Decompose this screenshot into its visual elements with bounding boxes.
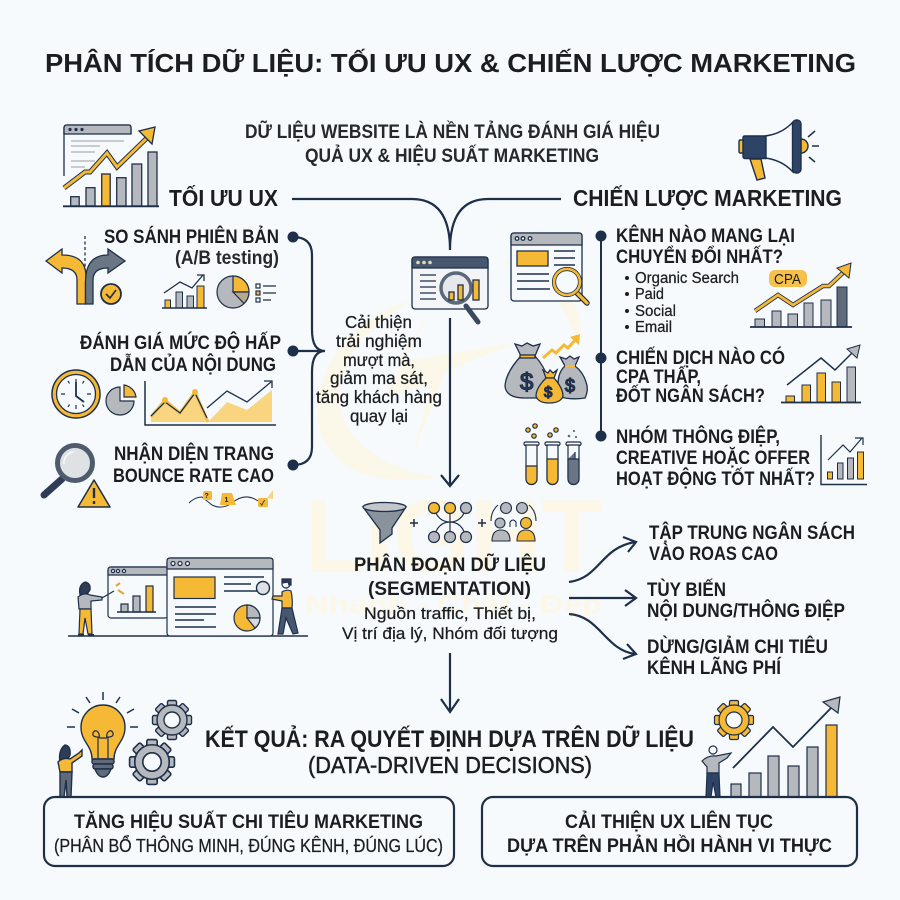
list: channels: Paid — [635, 286, 664, 303]
arrows: segmentation actions — [569, 537, 636, 659]
connector: headings to analysis icon — [292, 199, 561, 250]
icon: fork arrows — [46, 236, 125, 304]
icon: mini bar chart — [162, 275, 207, 308]
panel: marketing efficiency result: TĂNG HIỆU SUẤT CHI TIÊU MARKETING — [74, 809, 423, 833]
heading: segmentation — [354, 552, 546, 600]
text: CPA question: ĐỐT NGÂN SÁCH? — [616, 385, 765, 407]
text: A/B testing — [104, 226, 279, 269]
text: UX benefit: trải nghiệm — [336, 331, 422, 351]
chart: engagement area — [145, 381, 276, 425]
icon: bounce path: 1 — [224, 497, 228, 504]
panel: marketing items — [505, 225, 867, 490]
heading: segmentation: (SEGMENTATION) — [368, 578, 531, 600]
heading: Tối ưu UX: TỐI ƯU UX — [169, 184, 279, 211]
chart: CPA — [750, 263, 852, 327]
text: dimensions: Nguồn traffic, Thiết bị, — [364, 604, 536, 623]
icon: money bags: $ — [520, 369, 533, 396]
chart: campaign bars — [781, 345, 861, 402]
panel: UX improvement result: CẢI THIỆN UX LIÊN TỤC — [565, 809, 773, 833]
text: CPA question: CHIẾN DỊCH NÀO CÓ — [616, 347, 785, 369]
text: UX benefit: Cải thiện — [345, 312, 412, 332]
text: CPA question: CPA THẤP, — [616, 366, 701, 388]
chart: creative bars — [821, 435, 867, 484]
text: bounce rate: NHẬN DIỆN TRANG — [114, 443, 274, 465]
icon: growth chart with person — [702, 697, 840, 797]
text: action items: VÀO ROAS CAO — [649, 543, 778, 565]
text: bounce rate — [113, 443, 274, 487]
text: channels question — [616, 225, 795, 268]
heading: Chiến lược Marketing: CHIẾN LƯỢC MARKETING — [573, 184, 842, 211]
icon: small pie — [106, 385, 136, 415]
text: action items: TÙY BIẾN — [647, 579, 726, 601]
text: UX benefit — [316, 312, 442, 426]
icon: audience — [491, 502, 536, 541]
heading: segmentation: PHÂN ĐOẠN DỮ LIỆU — [354, 552, 546, 576]
panel: UX improvement result: DỰA TRÊN PHẢN HỒI HÀNH VI THỰC — [507, 833, 832, 857]
icon: clock — [52, 370, 100, 418]
subtitle — [245, 119, 660, 167]
icon: search window — [511, 233, 587, 303]
text: channels question: KÊNH NÀO MANG LẠI — [616, 225, 795, 247]
text: CPA question — [616, 347, 785, 407]
text: UX benefit: tăng khách hàng — [316, 387, 442, 407]
text: content engagement: DẪN CỦA NỘI DUNG — [110, 354, 276, 376]
icon: light bulb with gears — [58, 692, 192, 797]
illustration: people with dashboards — [68, 558, 308, 636]
text: dimensions — [342, 604, 558, 643]
icon: data analysis window — [412, 257, 488, 322]
icon: money bags: $ — [565, 376, 575, 396]
icon: network — [428, 502, 472, 542]
list: channels: Organic Search — [635, 270, 739, 287]
icon: UX growth chart — [63, 125, 159, 206]
text: dimensions: Vị trí địa lý, Nhóm đối tượng — [342, 624, 558, 643]
text: message question: HOẠT ĐỘNG TỐT NHẤT? — [616, 468, 815, 490]
watermark: Nhanh - Chất - Đẹp — [305, 591, 602, 619]
list: channels: Social — [635, 303, 676, 320]
list: channels: Email — [635, 319, 672, 336]
text: message question — [616, 426, 815, 490]
title: PHÂN TÍCH DỮ LIỆU: TỐI ƯU UX & CHIẾN LƯỢC MARKETING — [45, 48, 856, 78]
text: UX benefit: mượt mà, — [343, 350, 415, 370]
chart: CPA: CPA — [774, 272, 801, 288]
text: action items: KÊNH LÃNG PHÍ — [647, 657, 782, 679]
plus sign — [410, 519, 418, 527]
arrow: segmentation to result — [441, 653, 459, 712]
heading: result: KẾT QUẢ: RA QUYẾT ĐỊNH DỰA TRÊN DỮ LIỆU — [205, 724, 694, 753]
icon: test tubes — [524, 424, 581, 484]
icon: pie and legend — [217, 276, 276, 308]
icon: bounce path: ✓ — [260, 500, 266, 508]
list: channels — [625, 270, 739, 336]
text: action items — [647, 522, 855, 679]
heading: result — [205, 724, 694, 778]
text: bounce rate: BOUNCE RATE CAO — [113, 466, 274, 487]
timeline — [596, 230, 606, 442]
panel: marketing efficiency result — [44, 797, 454, 866]
text: action items: TẬP TRUNG NGÂN SÁCH — [649, 522, 855, 544]
icon: bounce path — [189, 490, 273, 508]
icon: money bags: $ — [544, 384, 553, 401]
panel: marketing efficiency result: (PHÂN BỔ THÔNG MINH, ĐÚNG KÊNH, ĐÚNG LÚC) — [54, 835, 443, 856]
text: action items: DỪNG/GIẢM CHI TIÊU — [647, 636, 828, 658]
panel: UX items — [44, 226, 281, 508]
text: A/B testing: (A/B testing) — [175, 248, 279, 269]
text: content engagement: ĐÁNH GIÁ MỨC ĐỘ HẤP — [80, 332, 281, 354]
panel: UX improvement result — [482, 797, 857, 866]
panel: segmentation — [342, 502, 558, 643]
arrow: analysis to segmentation — [441, 318, 459, 486]
connector: UX bracket — [288, 232, 325, 470]
text: A/B testing: SO SÁNH PHIÊN BẢN — [104, 226, 279, 248]
text: channels question: CHUYỂN ĐỔI NHẤT? — [616, 246, 783, 268]
icon: funnel — [363, 502, 406, 543]
text: UX benefit: quay lại — [350, 406, 408, 426]
watermark: LIGHT — [305, 479, 602, 595]
subtitle: QUẢ UX & HIỆU SUẤT MARKETING — [305, 143, 599, 167]
text: content engagement — [80, 332, 281, 376]
heading: result: (DATA-DRIVEN DECISIONS) — [308, 752, 592, 778]
icon: bounce path: ? — [204, 493, 209, 500]
text: message question: NHÓM THÔNG ĐIỆP, — [616, 426, 780, 448]
text: action items: NỘI DUNG/THÔNG ĐIỆP — [647, 600, 845, 622]
text: message question: CREATIVE HOẶC OFFER — [616, 447, 810, 469]
icon: magnifier with warning — [44, 446, 110, 507]
text: UX benefit: giảm ma sát, — [330, 368, 428, 388]
plus sign — [478, 519, 486, 527]
watermark — [305, 260, 602, 619]
icon: money bags — [505, 334, 587, 403]
subtitle: DỮ LIỆU WEBSITE LÀ NỀN TẢNG ĐÁNH GIÁ HIỆU — [245, 119, 660, 143]
icon: megaphone — [739, 120, 819, 180]
